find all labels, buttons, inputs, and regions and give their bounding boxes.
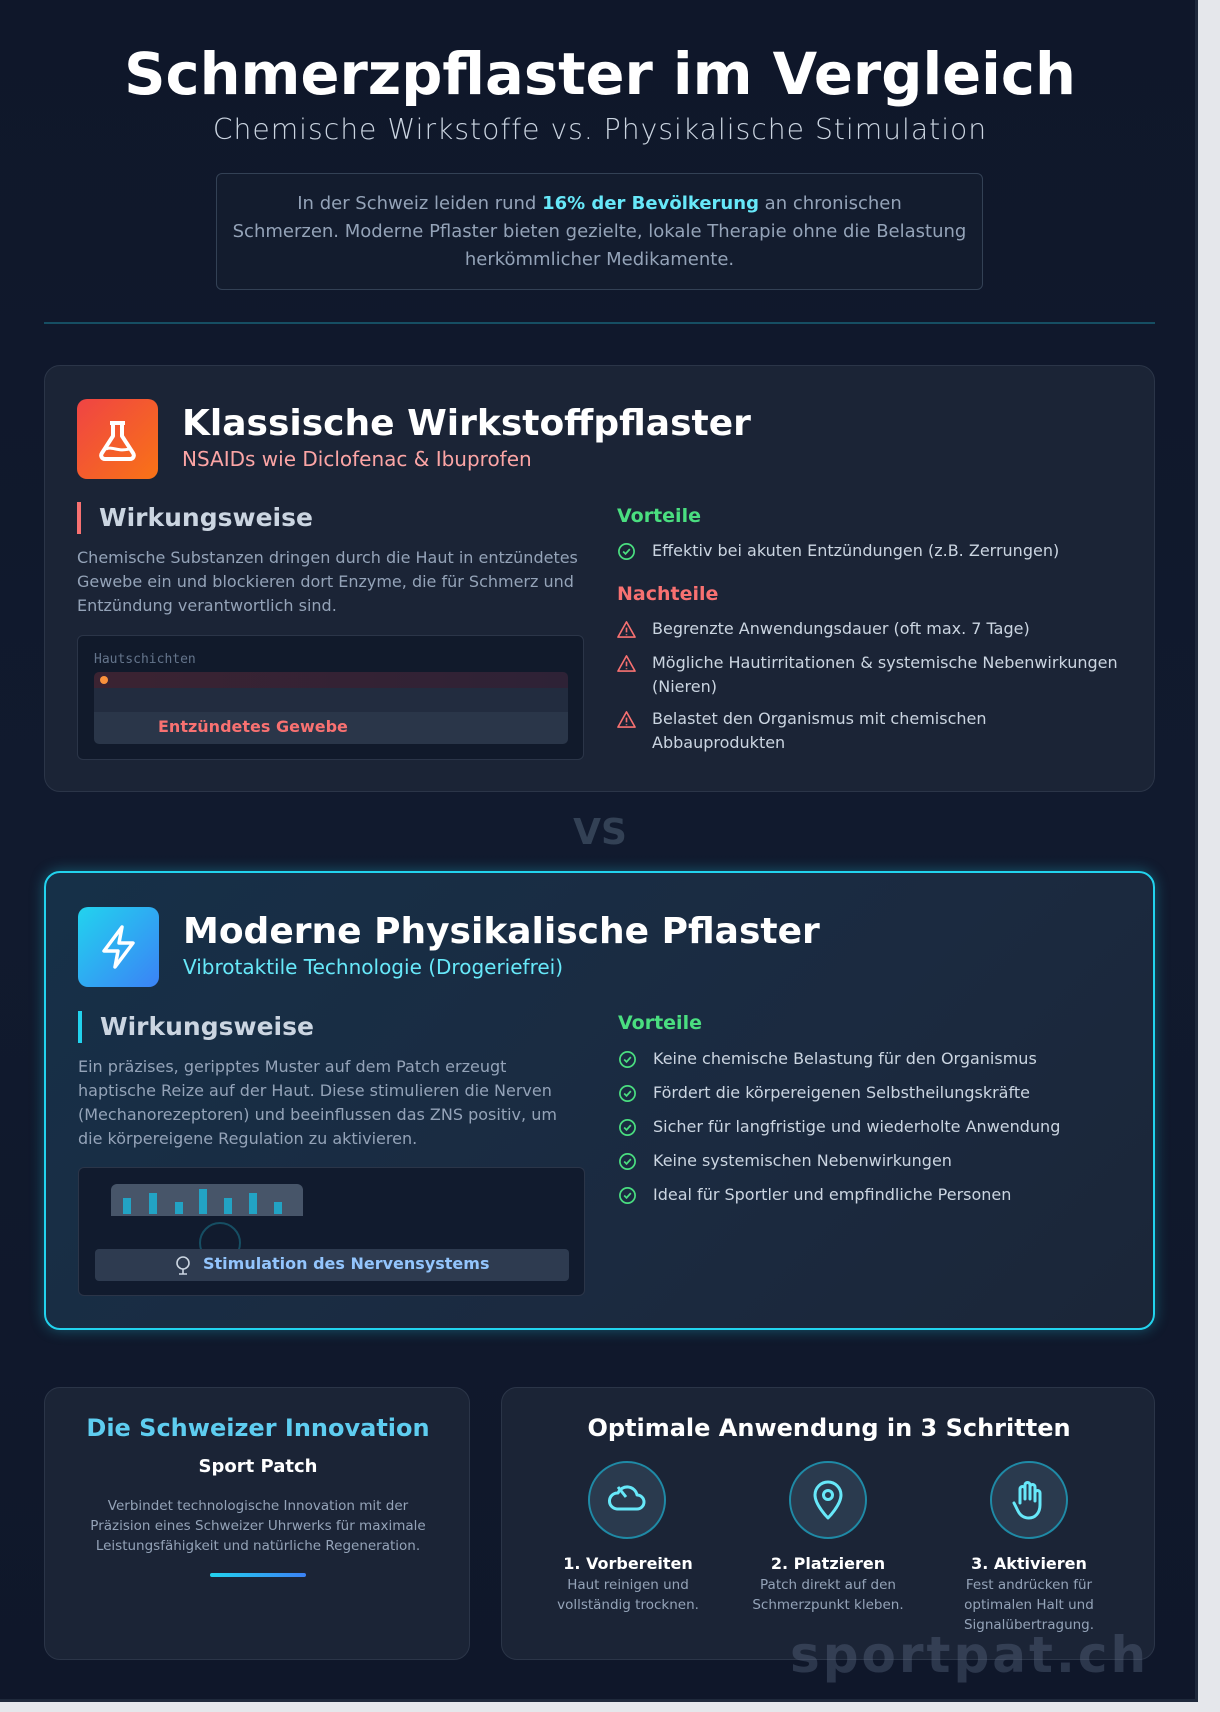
- Wirkungsweise heading: Wirkungsweise: [99, 503, 313, 532]
- step 2: [752, 1461, 904, 1613]
- step 3: 3. Aktivieren: [971, 1554, 1087, 1573]
- skin layers diagram: Hautschichten: [94, 652, 196, 667]
- panel: classic patches: [44, 365, 1155, 792]
- step 1: 1. Vorbereiten: [563, 1554, 693, 1573]
- skin layers diagram: [77, 635, 584, 760]
- watermark: sportpat.ch: [790, 1626, 1149, 1684]
- subheading: NSAIDs wie Diclofenac & Ibuprofen: [182, 447, 532, 471]
- Vorteile list: Fördert die körpereigenen Selbstheilungskräfte: [653, 1083, 1030, 1102]
- intro box: In der Schweiz leiden rund 16% der Bevölkerung an chronischen: [297, 193, 902, 214]
- step 3: [964, 1461, 1094, 1633]
- icon: lightbulb: [176, 1256, 190, 1275]
- intro box: [216, 173, 983, 290]
- Vorteile list: Keine systemischen Nebenwirkungen: [653, 1151, 952, 1170]
- step 2: Patch direkt auf den Schmerzpunkt kleben.: [752, 1577, 904, 1613]
- Wirkungsweise heading: Wirkungsweise: [100, 1012, 314, 1041]
- Vorteile list: Effektiv bei akuten Entzündungen (z.B. Zerrungen): [652, 541, 1059, 560]
- panel: modern physical patches: [44, 871, 1155, 1330]
- step 3: Fest andrücken für optimalen Halt und Signalübertragung.: [964, 1577, 1094, 1633]
- Nachteile list: Begrenzte Anwendungsdauer (oft max. 7 Tage): [652, 619, 1030, 638]
- step 1: [557, 1461, 699, 1613]
- heading: Die Schweizer Innovation: [86, 1414, 430, 1442]
- subtitle: Chemische Wirkstoffe vs. Physikalische Stimulation: [213, 113, 987, 146]
- step 2: 2. Platzieren: [771, 1554, 885, 1573]
- body text: Ein präzises, geripptes Muster auf dem Patch erzeugt haptische Reize auf der Haut. Diese stimulieren die Nerven (Mechanorezeptoren) und beeinflussen das ZNS positiv, um die körpereigene Regulation zu aktivieren.: [78, 1057, 557, 1148]
- skin layers diagram: Entzündetes Gewebe: [158, 717, 348, 736]
- Vorteile list: Vorteile: [618, 1012, 702, 1034]
- description: Verbindet technologische Innovation mit der Präzision eines Schweizer Uhrwerks für maximale Leistungsfähigkeit und natürliche Regeneration.: [90, 1498, 426, 1554]
- nerve stimulation diagram: Stimulation des Nervensystems: [203, 1254, 489, 1273]
- heading: Klassische Wirkstoffpflaster: [182, 403, 751, 444]
- panel: application steps: [501, 1387, 1155, 1660]
- heading: Moderne Physikalische Pflaster: [183, 911, 820, 952]
- Vorteile list: Ideal für Sportler und empfindliche Personen: [653, 1185, 1011, 1204]
- icon: flask: [77, 399, 158, 479]
- Nachteile list: Belastet den Organismus mit chemischen Abbauprodukten: [652, 709, 986, 752]
- Nachteile list: [617, 583, 1118, 752]
- heading: Optimale Anwendung in 3 Schritten: [587, 1414, 1071, 1442]
- intro box: Schmerzen. Moderne Pflaster bieten gezielte, lokale Therapie ohne die Belastung: [233, 221, 966, 242]
- Vorteile list: [618, 1012, 1060, 1204]
- icon: lightning: [78, 907, 159, 987]
- product name: Sport Patch: [199, 1456, 317, 1477]
- Nachteile list: Nachteile: [617, 583, 718, 605]
- title: Schmerzpflaster im Vergleich: [124, 41, 1076, 108]
- intro box: herkömmlicher Medikamente.: [465, 249, 734, 270]
- Vorteile list: Keine chemische Belastung für den Organismus: [653, 1049, 1037, 1068]
- step 1: Haut reinigen und vollständig trocknen.: [557, 1577, 699, 1613]
- Nachteile list: Mögliche Hautirritationen & systemische Nebenwirkungen (Nieren): [652, 653, 1118, 696]
- subheading: Vibrotaktile Technologie (Drogeriefrei): [183, 955, 563, 979]
- Vorteile list: Sicher für langfristige und wiederholte Anwendung: [653, 1117, 1060, 1136]
- Vorteile list: [617, 505, 1059, 560]
- body text: Chemische Substanzen dringen durch die Haut in entzündetes Gewebe ein und blockieren dort Enzyme, die für Schmerz und Entzündung verantwortlich sind.: [77, 548, 578, 615]
- Vorteile list: Vorteile: [617, 505, 701, 527]
- panel: Swiss innovation: [44, 1387, 470, 1660]
- VS label: VS: [573, 812, 627, 853]
- nerve stimulation diagram: [78, 1167, 585, 1296]
